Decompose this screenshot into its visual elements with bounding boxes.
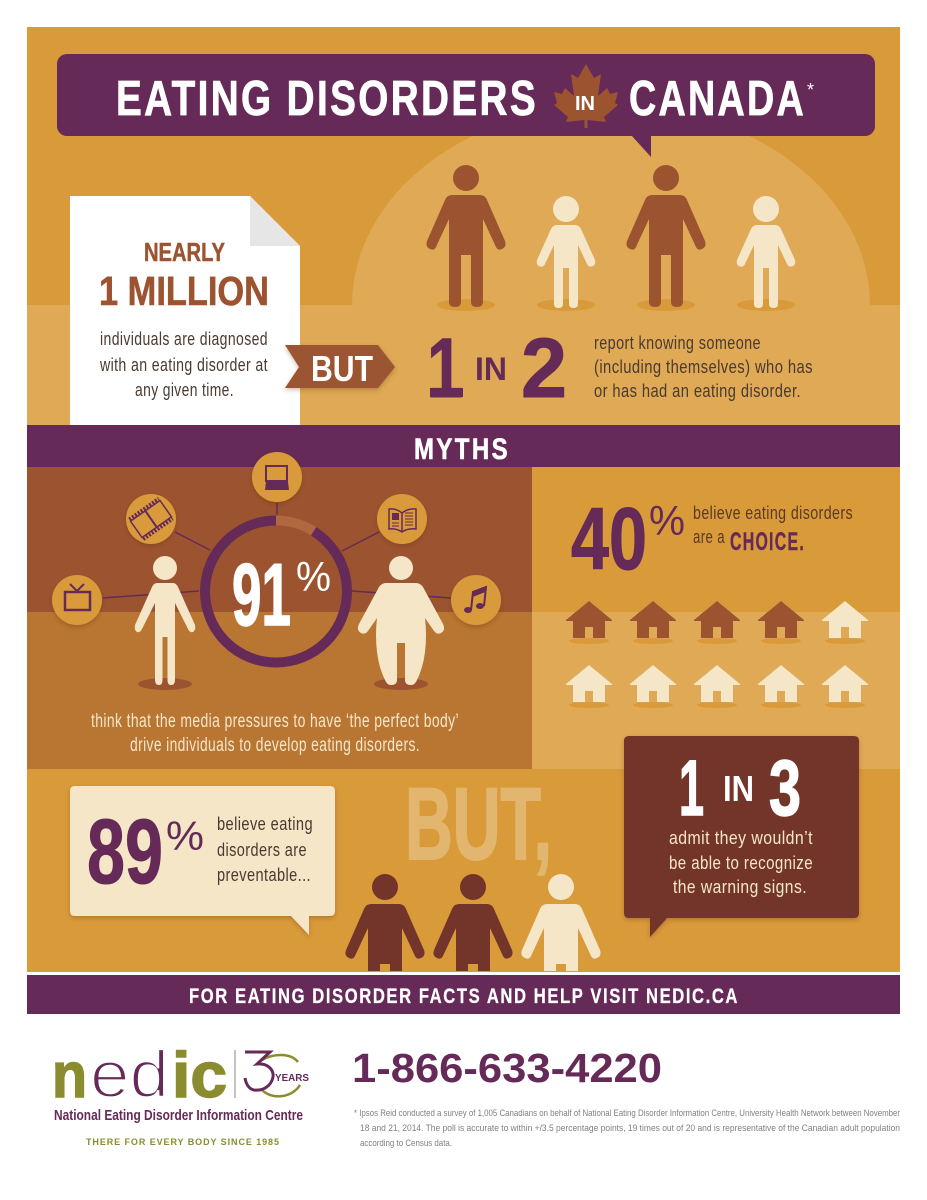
callout: 1 in 3: [624, 736, 859, 937]
arrow: but: BUT: [311, 348, 373, 389]
callout: 1 in 3: admit they wouldn’t: [669, 828, 813, 848]
figure: thin person: [135, 556, 195, 690]
panel: nearly 1 million paper note: any given time.: [135, 380, 234, 400]
panel: myths left background: [27, 467, 532, 769]
stat: 40 percent: 40: [571, 489, 647, 588]
callout: 89 percent: believe eating: [217, 814, 313, 834]
icon: open book: [377, 494, 427, 544]
title banner: EATING DISORDERS: [116, 72, 538, 126]
text: 91 percent caption: drive individuals to develop eating disorders.: [130, 735, 420, 756]
stat: 1 in 2: or has had an eating disorder.: [594, 381, 801, 401]
stat: 40 percent: are a: [693, 527, 725, 547]
connector lines: [103, 503, 451, 598]
logo: nedic 30 years: ic: [172, 1039, 227, 1111]
callout: 89 percent: %: [166, 813, 204, 859]
text: phone number: 1-866-633-4220: [352, 1045, 662, 1091]
callout: 89 percent: [70, 786, 335, 935]
pictogram: ten houses: [566, 601, 868, 708]
myths heading bar: MYTHS: [414, 433, 510, 466]
title banner: *: [807, 80, 814, 100]
callout: 1 in 3: the warning signs.: [673, 877, 807, 897]
icon: maple leaf: [554, 64, 618, 128]
callout: 1 in 3: 3: [769, 743, 801, 832]
panel: background: [27, 27, 900, 972]
callout: 89 percent: preventable...: [217, 865, 311, 885]
icon: music notes: [451, 575, 501, 625]
title banner: CANADA: [629, 72, 806, 126]
callout: 1 in 3: IN: [723, 768, 754, 809]
icon: computer: [252, 452, 302, 502]
logo: nedic 30 years: ed: [90, 1037, 169, 1111]
logo: nedic 30 years: YEARS: [275, 1072, 309, 1084]
arrow: but: [285, 345, 395, 389]
icon: television: [52, 575, 102, 625]
panel: nearly 1 million paper note: individuals are diagnosed: [100, 329, 268, 349]
footer call to action bar: [27, 975, 900, 1014]
people row: 1 in 2 pictogram: [426, 165, 795, 311]
title banner: [57, 54, 875, 157]
figure: large person: [358, 556, 444, 690]
stat: 40 percent: [571, 489, 853, 588]
stat: 1 in 2: (including themselves) who has: [594, 357, 813, 377]
text: tagline: THERE FOR EVERY BODY SINCE 1985: [86, 1137, 279, 1147]
callout: 1 in 3: 1: [679, 743, 704, 832]
stat: 40 percent: %: [649, 497, 685, 544]
panel: nearly 1 million paper note: 1 MILLION: [99, 268, 269, 314]
text: organization name: National Eating Disorder Information Centre: [54, 1107, 303, 1124]
people row: 1 in 3 pictogram: [345, 874, 601, 971]
text: footnote: according to Census data.: [360, 1138, 452, 1149]
chart: 91 percent ring: %: [296, 553, 331, 600]
chart: 91 percent ring: 91: [232, 545, 291, 644]
text: 91 percent caption: [91, 711, 459, 756]
icon: maple leaf: IN: [575, 93, 595, 115]
footer call to action bar: FOR EATING DISORDER FACTS AND HELP VISIT NEDIC.CA: [189, 985, 739, 1008]
logo: nedic 30 years: n: [52, 1039, 87, 1111]
text: 91 percent caption: think that the media pressures to have ‘the perfect body’: [91, 711, 459, 732]
stat: 1 in 2: report knowing someone: [594, 333, 761, 353]
callout: 89 percent: disorders are: [217, 840, 307, 860]
stat: 40 percent: believe eating disorders: [693, 503, 853, 523]
callout: 1 in 3: be able to recognize: [669, 853, 813, 873]
stat: 40 percent: CHOICE.: [730, 528, 805, 556]
stat: 1 in 2: 2: [521, 321, 567, 415]
chart: 91 percent ring: [205, 520, 347, 662]
logo: nedic 30 years: [52, 1037, 309, 1111]
callout: 89 percent: 89: [87, 801, 163, 903]
panel: nearly 1 million paper note: with an eating disorder at: [99, 355, 268, 375]
icon: film strip: [126, 494, 176, 544]
stat: 1 in 2: IN: [475, 351, 507, 387]
panel: myths right background: [532, 467, 900, 769]
stat: 1 in 2: [427, 321, 813, 415]
stat: 1 in 2: 1: [427, 321, 463, 415]
text: footnote: [354, 1108, 900, 1149]
panel: nearly 1 million paper note: [70, 196, 300, 425]
myths heading bar: [27, 425, 900, 467]
panel: nearly 1 million paper note: NEARLY: [144, 237, 225, 267]
heading: but: BUT,: [405, 767, 552, 881]
